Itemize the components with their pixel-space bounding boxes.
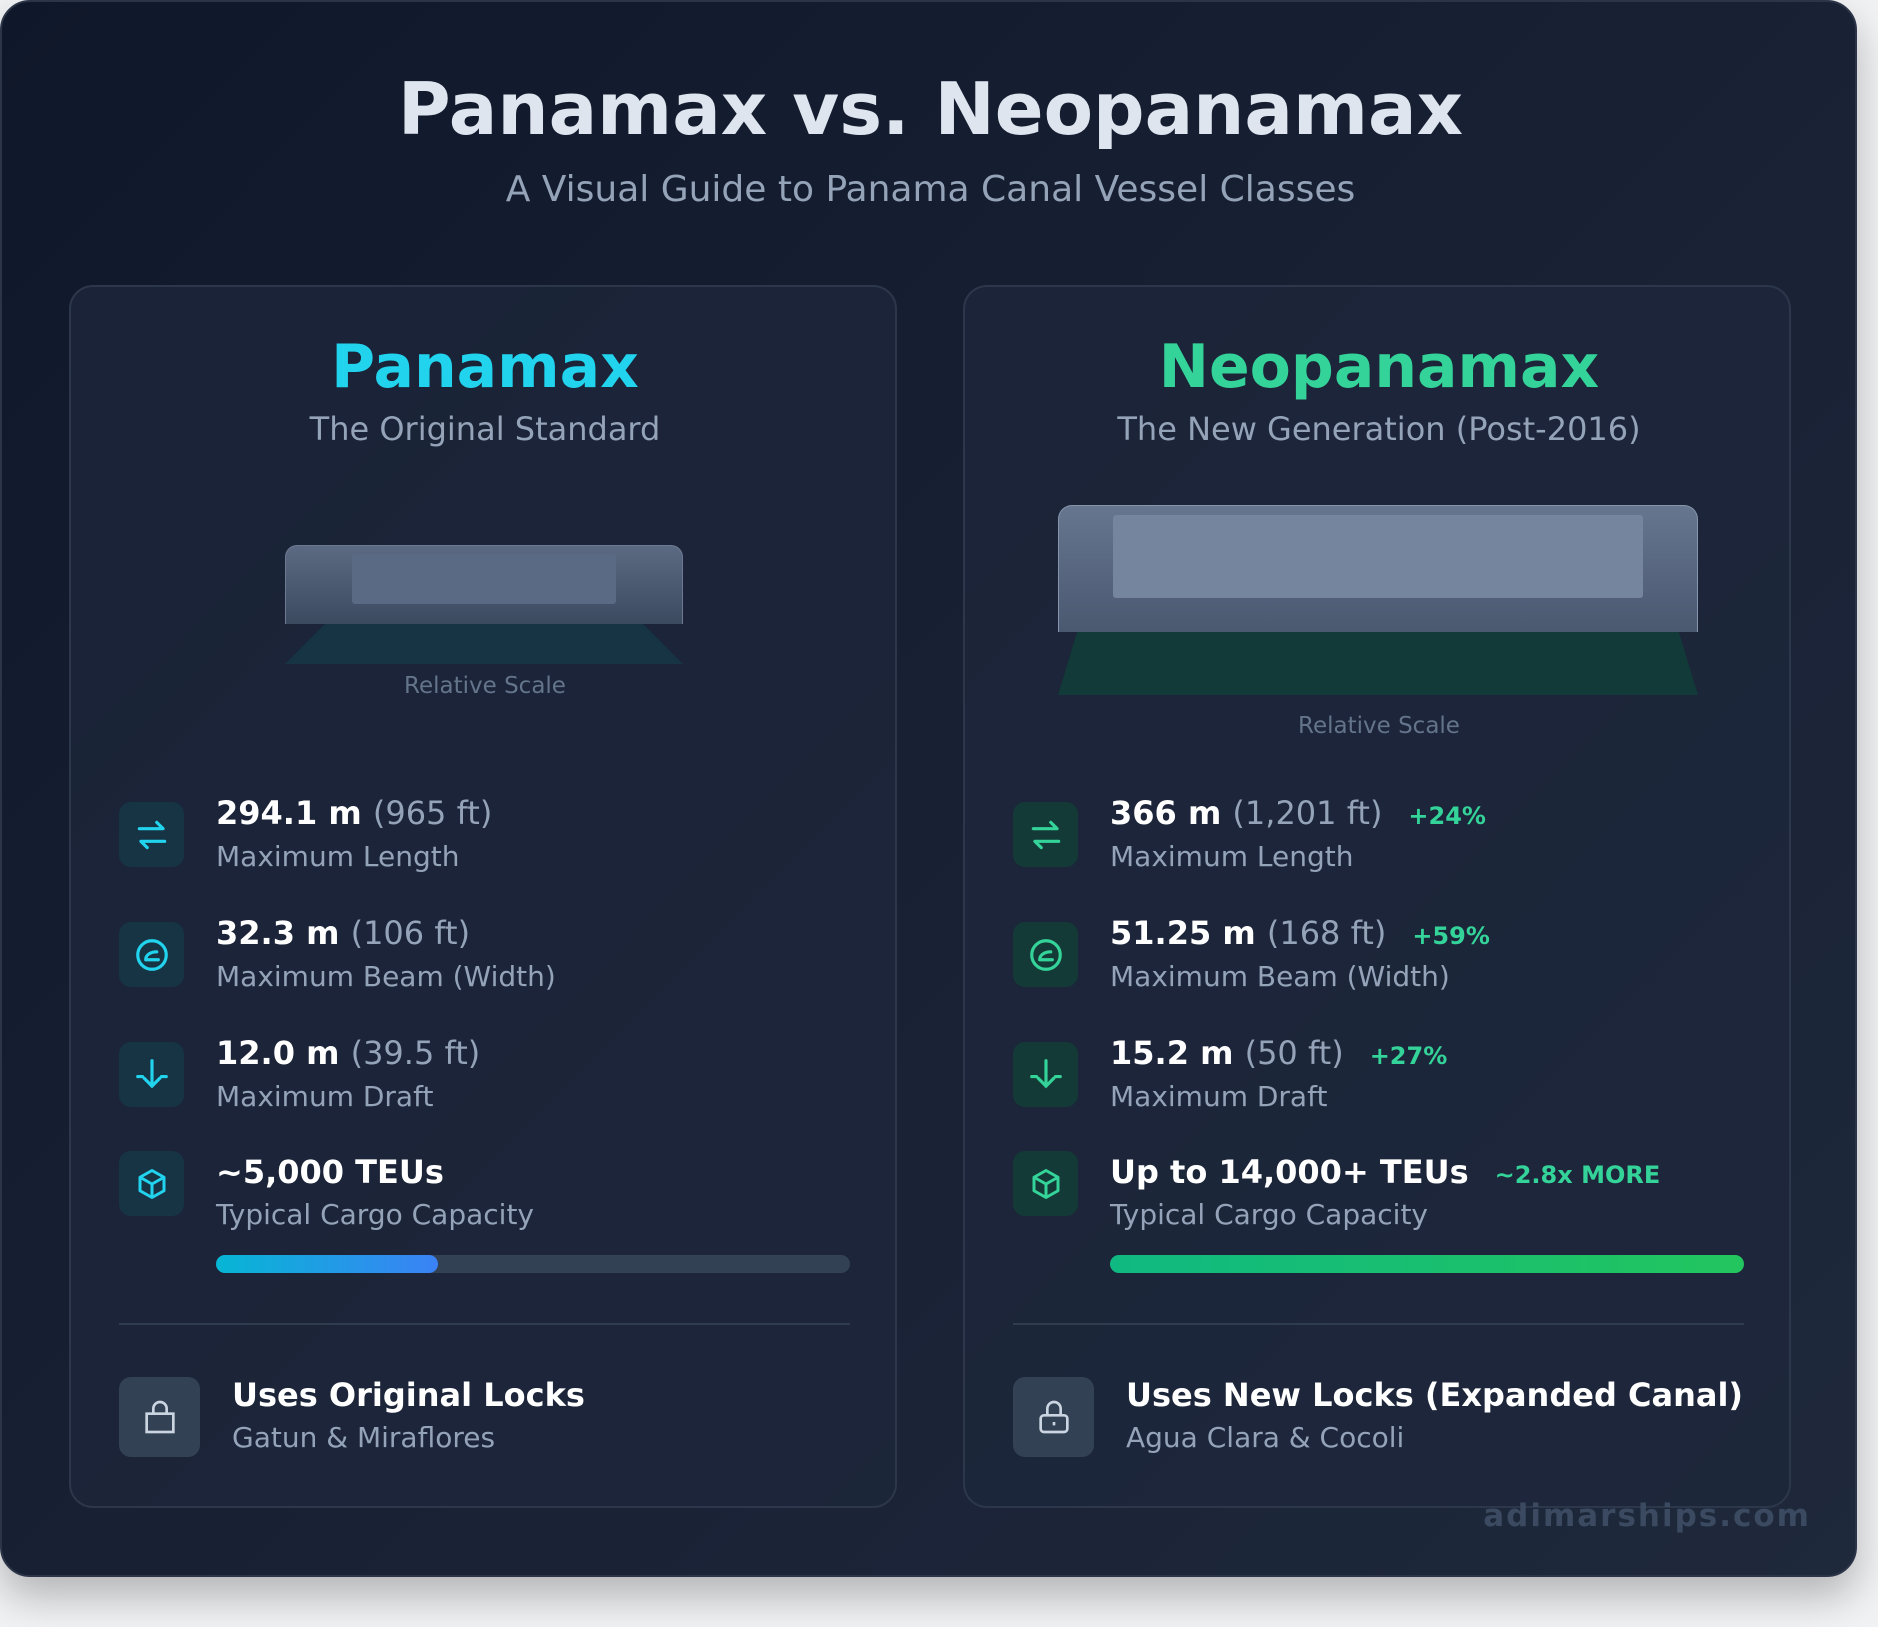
ship illustration [1058,505,1698,695]
subtitle: A Visual Guide to Panama Canal Vessel Classes [506,169,1355,210]
stat: draft: Maximum Draft [1110,1080,1327,1113]
stat: cargo: Up to 14,000+ TEUs ~2.8x MORE [1110,1153,1660,1191]
stat: draft: Maximum Draft [216,1080,433,1113]
stat: draft [119,1034,480,1113]
locks info [1013,1376,1743,1457]
stat: length: Maximum Length [216,840,459,873]
stat: draft: 15.2 m (50 ft) +27% [1110,1034,1447,1072]
relative scale label: Relative Scale [1298,713,1460,739]
relative scale label: Relative Scale [404,673,566,699]
panel: Neopanamax [963,285,1791,1508]
stat: length [1013,794,1486,873]
panel title: Neopanamax [1159,332,1599,402]
stat: draft [1013,1034,1447,1113]
stat: beam [1013,914,1490,993]
stat: length: 366 m (1,201 ft) +24% [1110,794,1486,832]
stat: length: 294.1 m (965 ft) [216,794,492,832]
stat: cargo: Typical Cargo Capacity [1110,1198,1428,1231]
ship illustration [285,545,683,664]
locks info: Agua Clara & Cocoli [1126,1421,1404,1454]
locks info: Uses New Locks (Expanded Canal) [1126,1376,1743,1414]
stat: beam: 32.3 m (106 ft) [216,914,470,952]
stat: beam: Maximum Beam (Width) [1110,960,1450,993]
stat: draft: 12.0 m (39.5 ft) [216,1034,480,1072]
stat: length [119,794,492,873]
capacity bar [216,1255,850,1273]
title: Panamax vs. Neopanamax [398,67,1463,151]
stat: length: Maximum Length [1110,840,1353,873]
locks info: Uses Original Locks [232,1376,585,1414]
locks info: Gatun & Miraflores [232,1421,495,1454]
stat: beam [119,914,556,993]
panel subtitle: The Original Standard [310,410,660,448]
stat: cargo: Typical Cargo Capacity [216,1198,534,1231]
panel title: Panamax [331,332,639,402]
stat: beam: Maximum Beam (Width) [216,960,556,993]
panel: Panamax [69,285,897,1508]
stat: beam: 51.25 m (168 ft) +59% [1110,914,1490,952]
capacity bar [1110,1255,1744,1273]
stat: cargo [119,1151,850,1273]
panel subtitle: The New Generation (Post-2016) [1117,410,1641,448]
stat: cargo [1013,1151,1744,1273]
watermark: adimarships.com [1483,1498,1811,1534]
locks info [119,1376,585,1457]
stat: cargo: ~5,000 TEUs [216,1153,444,1191]
